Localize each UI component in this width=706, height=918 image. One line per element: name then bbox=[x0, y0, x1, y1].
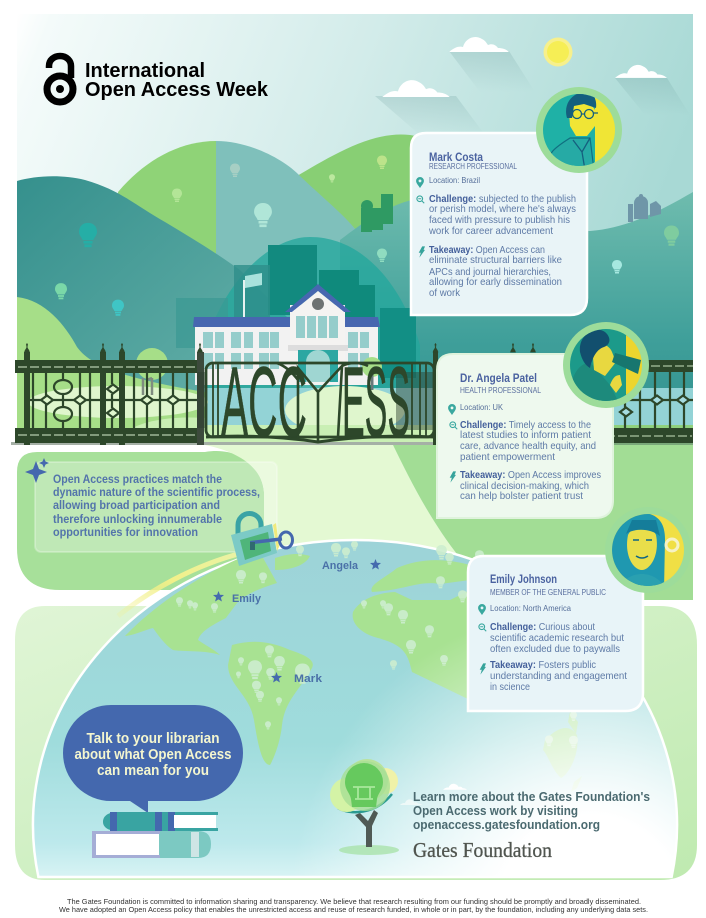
card: Emily Johnson: MEMBER OF THE GENERAL PUBLIC bbox=[490, 588, 606, 597]
card: Emily Johnson: Challenge: Curious about bbox=[490, 621, 595, 633]
card: Mark Costa: RESEARCH PROFESSIONAL bbox=[429, 162, 517, 171]
speech bubble: talk to your librarian: about what Open Access bbox=[74, 747, 232, 763]
logo text: Open Access Week bbox=[85, 79, 269, 101]
call to action: learn more: Learn more about the Gates Foundation's bbox=[413, 789, 650, 804]
sun glow edge bbox=[118, 553, 242, 616]
continent: eastern land bbox=[543, 728, 577, 778]
icon: location pin bbox=[416, 177, 424, 188]
map label: Angela bbox=[322, 559, 381, 572]
hill: right green bbox=[298, 134, 414, 229]
card: Dr. Angela Patel: patient empowerment bbox=[460, 451, 555, 463]
callout: open access practices: dynamic nature of the scientific process, bbox=[53, 487, 260, 499]
hill: centre green and teal bbox=[118, 141, 355, 284]
card: Dr. Angela Patel: latest studies to inform patient bbox=[460, 429, 591, 441]
card: Dr. Angela Patel: clinical decision-making, which bbox=[460, 480, 589, 492]
icon: magnifier bbox=[450, 422, 457, 429]
card: Mark Costa: Location: Brazil bbox=[429, 176, 480, 185]
map label: Angela: Angela bbox=[322, 560, 359, 572]
small clouds bbox=[400, 784, 467, 805]
continent: greenland bbox=[275, 554, 310, 570]
flag bbox=[243, 273, 262, 320]
ground band left bbox=[132, 418, 205, 442]
continent: europe and africa bbox=[353, 590, 470, 700]
bulbs on hills bbox=[55, 156, 679, 316]
callout: open access practices: allowing broad participation and bbox=[53, 500, 220, 512]
callout: open access practices: Open Access practices match the bbox=[53, 474, 222, 486]
icon: lightning bbox=[480, 663, 486, 675]
ground band under gate bbox=[205, 425, 433, 442]
map label: Emily: Emily bbox=[232, 593, 262, 605]
continent: south america bbox=[228, 642, 313, 765]
call to action: learn more: Open Access work by visiting bbox=[413, 803, 578, 818]
hill: left dark teal bbox=[17, 176, 300, 391]
ground right green bbox=[393, 445, 693, 600]
call to action: learn more: openaccess.gatesfoundation.org bbox=[413, 817, 600, 832]
card: Dr. Angela Patel: care, advance health equity, and bbox=[460, 440, 596, 452]
portrait: Emily Johnson bbox=[605, 514, 684, 593]
trees bbox=[136, 348, 382, 395]
footer note: We have adopted an Open Access policy that enables the unrestricted access and reuse of research funded, in whole or in part, by the foundation, including any underlying data sets. bbox=[59, 905, 648, 914]
card: Dr. Angela Patel: can help bolster patient trust bbox=[460, 490, 583, 502]
card: Dr. Angela Patel bbox=[437, 354, 613, 518]
globe bbox=[33, 540, 677, 877]
fence right section bbox=[510, 343, 693, 445]
callout: open access practices bbox=[25, 458, 277, 552]
skyline behind school bbox=[176, 237, 420, 400]
card: Mark Costa: eliminate structural barriers like bbox=[429, 254, 562, 266]
globe disc bbox=[33, 540, 677, 877]
logo text: International bbox=[85, 60, 205, 82]
card: Emily Johnson: Location: North America bbox=[490, 604, 572, 613]
portrait: Mark Costa bbox=[536, 87, 625, 173]
speech bubble: talk to your librarian: can mean for you bbox=[97, 763, 209, 779]
icon: lightning bbox=[450, 471, 456, 483]
card: Dr. Angela Patel: Takeaway: Open Access improves bbox=[460, 469, 601, 481]
hill: right ridge bbox=[340, 192, 693, 388]
gate arch with ACCESS lettering: ESS bbox=[342, 348, 410, 458]
portrait: Dr. Angela Patel bbox=[563, 322, 649, 408]
continent: small island bbox=[568, 712, 582, 792]
lake bbox=[200, 388, 693, 428]
ground left green panel bbox=[17, 451, 264, 590]
card: Emily Johnson: Emily Johnson bbox=[490, 574, 557, 586]
map label: Mark: Mark bbox=[294, 673, 323, 685]
speech bubble: talk to your librarian bbox=[63, 705, 243, 813]
logo text bbox=[85, 60, 269, 101]
ground centre pale bbox=[205, 445, 460, 580]
icon: location pin bbox=[478, 604, 486, 615]
icon: stack of books bbox=[92, 812, 218, 858]
card: Emily Johnson bbox=[468, 556, 643, 711]
icon: location pin bbox=[448, 404, 456, 415]
fade at lower right bbox=[33, 540, 677, 877]
card: Mark Costa: APCs and journal hierarchies, bbox=[429, 266, 551, 278]
footer note bbox=[59, 897, 648, 914]
card: Mark Costa: faced with pressure to publish his bbox=[429, 214, 570, 226]
card: Mark Costa: Takeaway: Open Access can bbox=[429, 244, 545, 256]
globe bulbs bbox=[176, 541, 578, 748]
gate arch with ACCESS lettering bbox=[197, 343, 438, 458]
sun bbox=[544, 38, 572, 66]
gate arch with ACCESS lettering: ACC bbox=[221, 348, 307, 458]
ground lens left bbox=[28, 386, 208, 418]
school building bbox=[193, 284, 380, 385]
map label: Mark bbox=[271, 672, 323, 685]
card: Emily Johnson: scientific academic research but bbox=[490, 632, 624, 644]
ground lens bbox=[285, 386, 404, 425]
card: Mark Costa: or perish model, where he's always bbox=[429, 203, 576, 215]
callout: open access practices: opportunities for innovation bbox=[53, 527, 198, 539]
map label: Emily bbox=[213, 591, 262, 605]
ground band right bbox=[614, 425, 693, 428]
card: Mark Costa: Mark Costa bbox=[429, 152, 484, 164]
icon: open padlock bbox=[47, 56, 73, 102]
icon: magnifier bbox=[479, 624, 486, 631]
fence left section bbox=[11, 343, 441, 445]
hill: left light green bbox=[17, 297, 205, 428]
icon: sparkles bbox=[25, 458, 49, 483]
callout: open access practices: therefore unlocking innumerable bbox=[53, 514, 222, 526]
clouds bbox=[375, 37, 678, 122]
card: Mark Costa: work for career advancement bbox=[428, 225, 553, 237]
logo: Gates Foundation: Gates Foundation bbox=[413, 838, 552, 862]
speech bubble: talk to your librarian: Talk to your librarian bbox=[86, 731, 220, 747]
card: Dr. Angela Patel: HEALTH PROFESSIONAL bbox=[460, 386, 541, 395]
continent: northern europe bbox=[371, 560, 470, 592]
panel: sky and landscape bbox=[17, 14, 693, 445]
sky bbox=[17, 14, 693, 388]
icon: padlock and key bbox=[231, 514, 292, 566]
card: Mark Costa: allowing for early dissemination bbox=[429, 276, 562, 288]
card: Mark Costa bbox=[411, 133, 587, 315]
icon: magnifier bbox=[417, 196, 424, 203]
card: Emily Johnson: Takeaway: Fosters public bbox=[490, 659, 596, 671]
city silhouette: green bbox=[361, 194, 393, 232]
card: Emily Johnson: understanding and engagement bbox=[490, 670, 627, 682]
footer note: The Gates Foundation is committed to information sharing and transparency. We believe that research resulting from our funding should be promptly and broadly disseminated. bbox=[67, 897, 641, 906]
icon: lightbulb tree bbox=[330, 759, 399, 855]
card: Dr. Angela Patel: Challenge: Timely access to the bbox=[460, 419, 591, 431]
lower panel bbox=[15, 606, 697, 880]
logo: International Open Access Week bbox=[47, 56, 269, 102]
card: Emily Johnson: in science bbox=[490, 681, 530, 693]
card: Mark Costa: Challenge: subjected to the publish bbox=[429, 193, 576, 205]
city silhouette: blue bbox=[628, 194, 661, 222]
call to action: learn more bbox=[413, 789, 650, 832]
card: Dr. Angela Patel: Location: UK bbox=[460, 403, 504, 412]
continent: north america bbox=[125, 556, 277, 655]
card: Mark Costa: of work bbox=[429, 287, 461, 299]
card: Dr. Angela Patel: Dr. Angela Patel bbox=[460, 373, 537, 385]
card: Emily Johnson: often excluded due to paywalls bbox=[490, 643, 620, 655]
icon: lightning bbox=[419, 246, 425, 258]
